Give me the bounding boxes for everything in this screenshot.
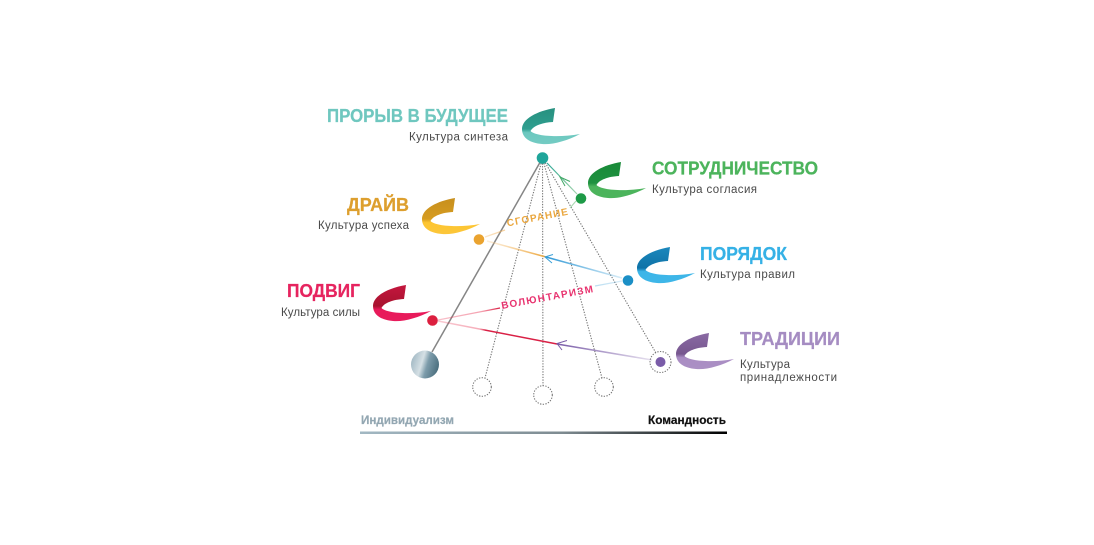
icon: yellow swirl [422, 198, 480, 234]
dotted empty circle 2 [534, 386, 552, 404]
heading: feat [281, 281, 360, 319]
heading: order: ПОРЯДОК [700, 244, 788, 264]
heading: drive [318, 194, 410, 232]
heading: breakthrough: ПРОРЫВ В БУДУЩЕЕ [327, 106, 508, 126]
dotted empty circle 1 [473, 378, 491, 396]
label: voluntarism: ВОЛЮНТАРИЗМ [501, 284, 594, 312]
line: burnout [485, 201, 576, 237]
arrow: purple to red [438, 321, 652, 360]
heading: feat: ПОДВИГ [287, 281, 360, 301]
arrow: green to teal [547, 163, 577, 194]
heading: cooperation: СОТРУДНИЧЕСТВО [652, 158, 818, 178]
icon: red swirl [373, 285, 431, 321]
node: purple [656, 357, 666, 367]
heading: order [700, 244, 795, 281]
axis: individualism to teamwork: Индивидуализм [361, 415, 454, 427]
pyramid lines: strings from apex [432, 158, 656, 386]
icon: purple swirl [676, 333, 734, 369]
node: green [576, 193, 586, 204]
icon: blue swirl [637, 247, 695, 283]
pendulum ball: individualism [411, 350, 439, 378]
node: red [427, 315, 438, 326]
node: teal [537, 152, 548, 164]
label: burnout: СГОРАНИЕ [506, 207, 569, 229]
node: blue [623, 275, 633, 286]
dotted ring around purple node [650, 352, 671, 372]
heading: cooperation: Культура согласия [652, 184, 757, 196]
dotted empty circle 3 [595, 378, 613, 396]
heading: cooperation [652, 158, 818, 196]
axis: individualism to teamwork: Командность [648, 415, 726, 427]
heading: drive: Культура успеха [318, 220, 410, 232]
heading: drive: ДРАЙВ [347, 194, 409, 215]
heading: order: Культура правил [700, 269, 795, 281]
node: orange [474, 234, 484, 245]
arrow: blue to orange [487, 241, 622, 278]
line: voluntarism [438, 281, 622, 320]
axis: individualism to teamwork [360, 415, 727, 434]
heading: traditions: Культура [740, 359, 791, 371]
heading: traditions [740, 329, 840, 384]
heading: traditions: ТРАДИЦИИ [740, 329, 840, 349]
icon: green swirl [588, 162, 646, 198]
icon: teal swirl [522, 108, 580, 144]
heading: breakthrough [327, 106, 509, 144]
heading: feat: Культура силы [281, 307, 360, 319]
heading: breakthrough: Культура синтеза [409, 132, 509, 144]
heading: traditions: принадлежности [740, 372, 837, 384]
